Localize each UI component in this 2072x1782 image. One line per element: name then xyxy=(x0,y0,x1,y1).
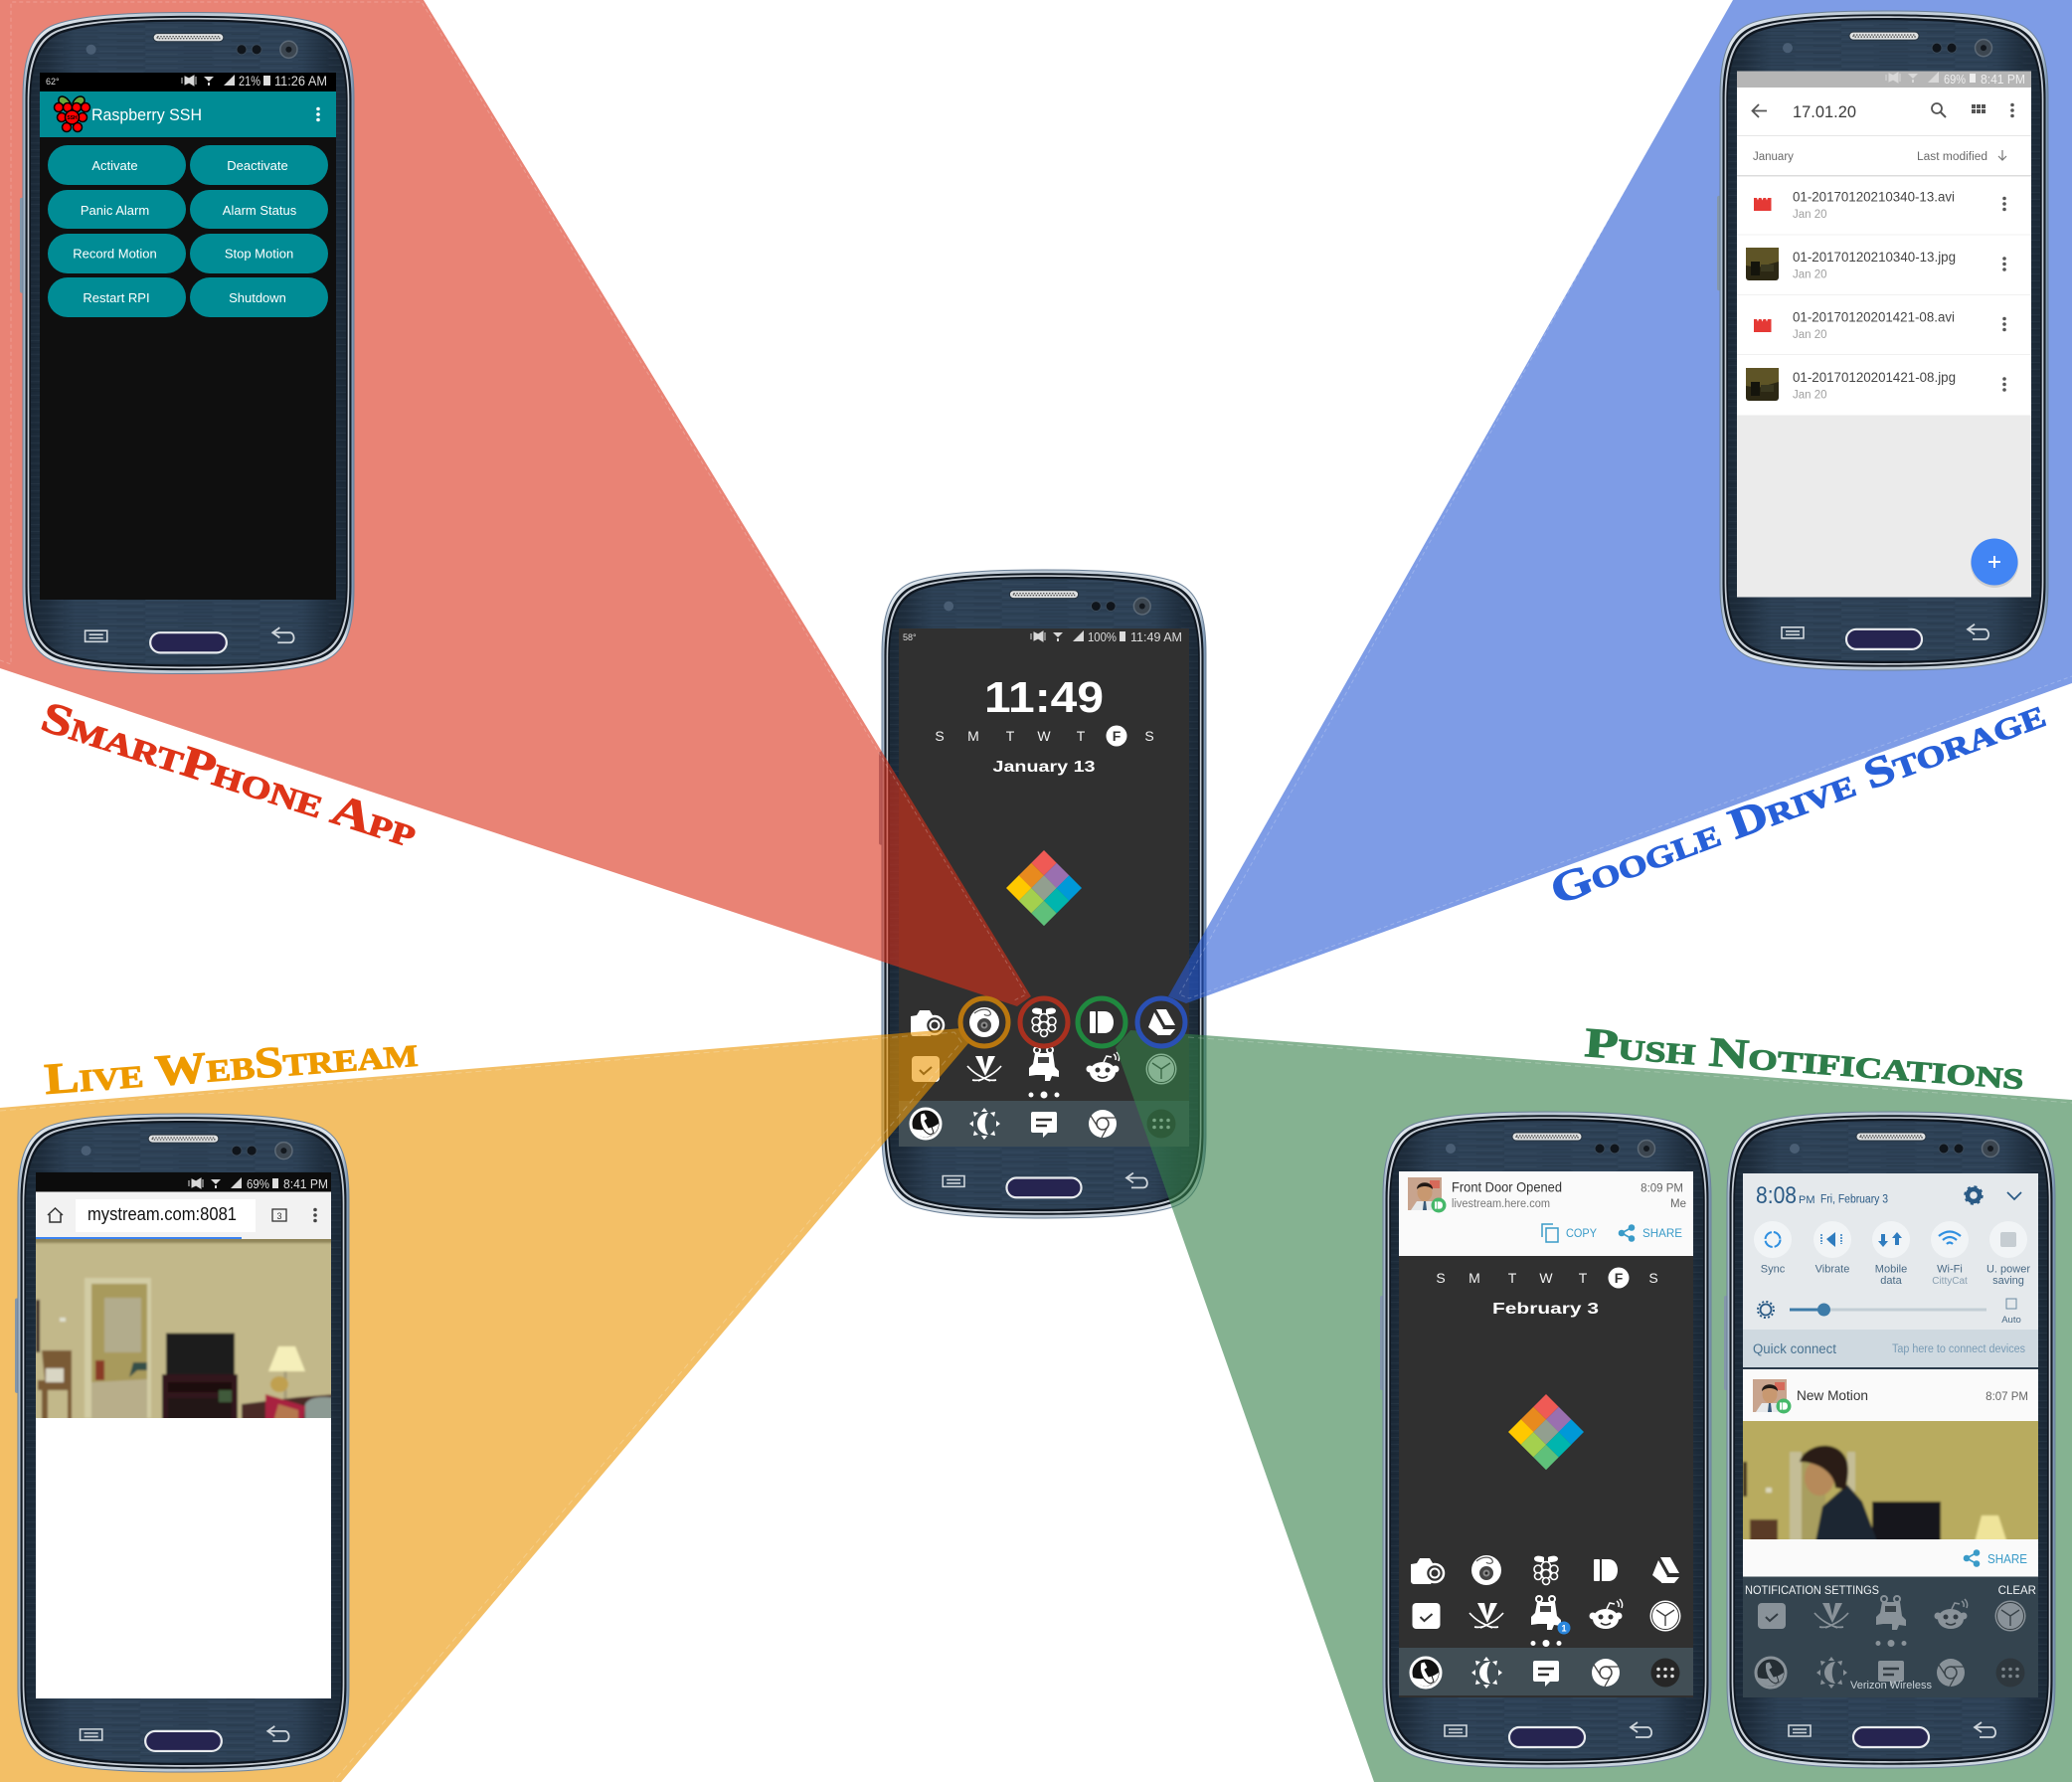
date: February 3 xyxy=(1492,1301,1599,1318)
button labels: Activate xyxy=(91,158,138,173)
weekday row: T xyxy=(1508,1270,1517,1286)
colour diamond logo xyxy=(1006,850,1082,926)
weekday row: S xyxy=(1648,1270,1658,1286)
motion notification: 8:07 PM xyxy=(1986,1391,2028,1403)
status bar: 8:41 PM xyxy=(1981,72,2025,87)
button labels: Alarm Status xyxy=(223,203,297,218)
weekday row: T xyxy=(1579,1270,1588,1286)
quick settings panel: Mobile xyxy=(1875,1263,1907,1275)
notification card: SHARE xyxy=(1642,1226,1682,1240)
shade footer xyxy=(1745,1585,2036,1692)
button labels: Panic Alarm xyxy=(81,203,149,218)
toolbar: 17.01.20 xyxy=(1793,102,1856,121)
notification card: COPY xyxy=(1566,1226,1597,1240)
weekday row: T xyxy=(1006,728,1015,744)
app header xyxy=(40,91,336,137)
file list xyxy=(1737,177,2031,416)
file list: 01-20170120201421-08.jpg xyxy=(1793,370,1956,385)
highlighted icon: pushbullet xyxy=(1078,998,1125,1046)
highlighted icon: raspberry xyxy=(1020,998,1068,1046)
colour diamond logo xyxy=(1508,1394,1584,1470)
status bar: 100% xyxy=(1088,629,1117,644)
button labels: Restart RPI xyxy=(83,290,150,305)
quick settings panel xyxy=(1743,1173,2038,1330)
quick settings panel: Auto xyxy=(2001,1315,2021,1326)
icon: raspberry logo: SSH xyxy=(67,115,78,121)
phone: browser live stream xyxy=(15,1114,349,1772)
label: push notifications: Push Notifications xyxy=(1583,1020,2025,1099)
quick settings panel: Wi-Fi xyxy=(1937,1263,1963,1275)
quick settings panel: Vibrate xyxy=(1815,1263,1849,1275)
status bar: 69% xyxy=(247,1176,269,1191)
notification card: Me xyxy=(1670,1198,1686,1210)
browser toolbar: mystream.com:8081 xyxy=(87,1204,237,1224)
shade footer: CLEAR xyxy=(1998,1585,2036,1597)
status bar xyxy=(903,629,1182,644)
share row xyxy=(1743,1539,2038,1577)
weekday row: W xyxy=(1539,1270,1553,1286)
phone: notification shade xyxy=(1724,1112,2055,1768)
notification card: 8:09 PM xyxy=(1640,1183,1683,1195)
status bar: 69% xyxy=(1944,72,1966,87)
highlighted icon: live stream camera xyxy=(960,998,1008,1046)
weekday row: M xyxy=(1468,1270,1480,1286)
weekday row: S xyxy=(935,728,945,744)
file list: 01-20170120201421-08.avi xyxy=(1793,310,1955,324)
weekday row: T xyxy=(1077,728,1086,744)
status bar: 58° xyxy=(903,632,917,642)
button grid xyxy=(48,145,328,317)
sort row: Last modified xyxy=(1917,151,1987,163)
shade footer: Verizon Wireless xyxy=(1850,1680,1932,1692)
quick settings panel: data xyxy=(1880,1275,1903,1287)
quick connect bar xyxy=(1743,1330,2038,1369)
weekday row: F xyxy=(1113,728,1122,744)
wedge: google drive storage (blue) xyxy=(1168,0,2072,1003)
label: google drive storage: Google Drive Storage xyxy=(1544,690,2051,914)
quick settings panel: CittyCat xyxy=(1932,1276,1968,1287)
quick connect bar: Quick connect xyxy=(1753,1341,1836,1356)
notification card: Front Door Opened xyxy=(1452,1179,1562,1195)
dock xyxy=(899,1101,1189,1147)
app icons xyxy=(1411,1555,1680,1689)
file list: Jan 20 xyxy=(1793,390,1827,402)
clock: 11:49 xyxy=(984,673,1104,722)
browser toolbar: 3 xyxy=(276,1211,282,1221)
status bar: 8:41 PM xyxy=(283,1176,328,1191)
share row: SHARE xyxy=(1987,1552,2027,1566)
status bar: 21% xyxy=(239,74,260,89)
file list: Jan 20 xyxy=(1793,329,1827,341)
highlighted icon: google drive xyxy=(1137,998,1185,1046)
quick connect bar: Tap here to connect devices xyxy=(1892,1343,2025,1355)
quick settings panel: PM xyxy=(1799,1194,1815,1206)
quick settings panel: U. power xyxy=(1986,1263,2030,1275)
file list: 01-20170120210340-13.avi xyxy=(1793,189,1955,205)
date: January 13 xyxy=(992,759,1096,776)
shade footer: NOTIFICATION SETTINGS xyxy=(1745,1585,1879,1597)
live video frame xyxy=(30,1233,338,1422)
weekday row: S xyxy=(1144,728,1154,744)
dimmed home screen xyxy=(1756,1596,2026,1689)
button labels: Shutdown xyxy=(229,290,286,305)
sort row xyxy=(1737,135,2031,177)
phone: front door notification xyxy=(1380,1112,1711,1768)
status bar xyxy=(1737,72,2031,88)
button labels: Deactivate xyxy=(227,158,288,173)
motion snapshot xyxy=(1735,1412,2048,1546)
center phone: home screen xyxy=(879,570,1206,1218)
motion notification: New Motion xyxy=(1797,1388,1868,1403)
label: live webstream: Live WebStream xyxy=(43,1027,420,1104)
file list: Jan 20 xyxy=(1793,209,1827,221)
wedge: live webstream (yellow) xyxy=(0,1028,969,1782)
status bar xyxy=(40,73,336,91)
notification card xyxy=(1399,1171,1693,1256)
dock xyxy=(1399,1648,1693,1695)
wedge: smartphone app (red) xyxy=(0,0,1031,1006)
notification card: livestream.here.com xyxy=(1452,1198,1550,1210)
status bar: 11:49 AM xyxy=(1130,629,1182,644)
app icons xyxy=(911,1010,1177,1140)
quick settings panel: Fri, February 3 xyxy=(1820,1193,1888,1205)
app header: Raspberry SSH xyxy=(91,105,202,124)
status bar xyxy=(36,1172,331,1191)
button labels: Record Motion xyxy=(73,247,157,261)
weekday row xyxy=(1436,1267,1658,1289)
file list: 01-20170120210340-13.jpg xyxy=(1793,250,1956,265)
weekday row: W xyxy=(1037,728,1051,744)
motion notification xyxy=(1743,1369,2038,1421)
quick settings panel: 8:08 xyxy=(1756,1182,1797,1209)
phone: raspberry ssh app xyxy=(20,12,354,674)
weekday row: F xyxy=(1615,1270,1624,1286)
file list: Jan 20 xyxy=(1793,268,1827,280)
toolbar xyxy=(1737,88,2031,135)
phone: google drive listing xyxy=(1717,11,2048,670)
status bar: 62° xyxy=(46,77,60,87)
wedge: push notifications (green) xyxy=(1116,1030,2072,1782)
weekday row: S xyxy=(1436,1270,1446,1286)
weekday row xyxy=(935,726,1154,746)
quick settings panel: saving xyxy=(1992,1275,2024,1287)
label: smartphone app: SmartPhone App xyxy=(36,692,423,857)
app icons: 1 xyxy=(1561,1623,1567,1633)
button labels: Stop Motion xyxy=(225,247,293,261)
icon: raspberry logo xyxy=(54,96,89,131)
quick settings panel: Sync xyxy=(1761,1263,1786,1275)
sort row: January xyxy=(1753,151,1794,163)
browser toolbar xyxy=(36,1191,331,1239)
button labels xyxy=(73,158,297,305)
floating add button xyxy=(1971,539,2018,588)
weekday row: M xyxy=(967,728,979,744)
status bar: 11:26 AM xyxy=(274,74,327,89)
